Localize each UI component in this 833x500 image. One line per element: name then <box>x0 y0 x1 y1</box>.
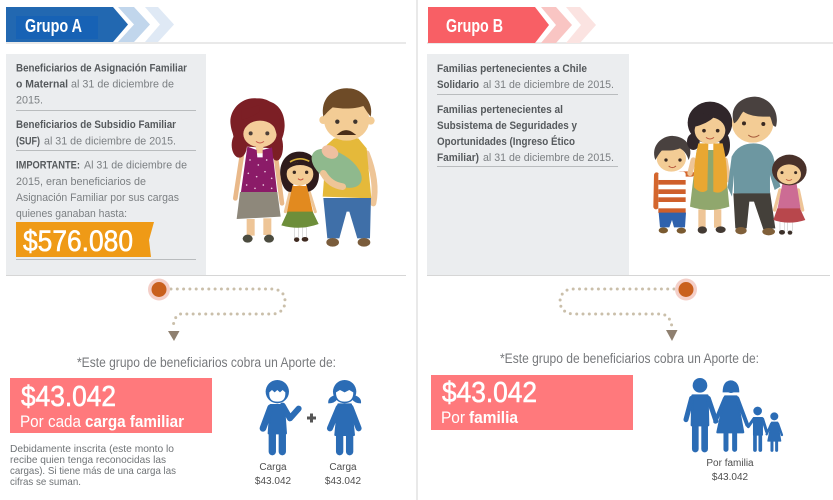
callout: income limit: $576.080 <box>23 225 133 258</box>
panel: eligibility text A: al 31 de diciembre de 2015. <box>44 136 176 148</box>
icon: boy plus girl: Carga <box>259 462 287 473</box>
illustration: family A <box>230 88 375 247</box>
panel: eligibility text A: IMPORTANTE: <box>16 160 80 172</box>
panel: eligibility text B <box>427 54 629 275</box>
callout: amount B: Por <box>441 408 465 427</box>
icon: boy plus girl: $43.042 <box>325 476 362 487</box>
panel: eligibility text A: Beneficiarios de Asignación Familiar <box>16 62 188 74</box>
icon: boy plus girl: Carga <box>329 462 357 473</box>
text: note A: Debidamente inscrita (este monto lo <box>10 443 174 455</box>
panel: eligibility text B: Familias pertenecientes a Chile <box>437 63 587 75</box>
callout: amount A: carga familiar <box>85 412 184 431</box>
panel: eligibility text B: Familiar) <box>437 152 479 164</box>
panel: eligibility text A <box>6 54 206 275</box>
text: note A: cifras se suman. <box>10 476 81 488</box>
icon: family <box>686 378 782 483</box>
panel: eligibility text A: al 31 de diciembre de <box>71 78 174 90</box>
panel: eligibility text A: (SUF) <box>16 136 40 148</box>
heading: Grupo B banner: Grupo B <box>446 16 503 36</box>
connector arrow B <box>560 278 697 341</box>
text: note A: cargas). Si tiene más de una carga las <box>10 465 176 477</box>
callout: amount B: familia <box>469 408 518 427</box>
panel: eligibility text B: Oportunidades (Ingreso Ético <box>437 135 575 148</box>
panel: eligibility text A: 2015, eran beneficiarios de <box>16 176 146 188</box>
icon: boy plus girl: $43.042 <box>255 476 292 487</box>
text: aporte B: *Este grupo de beneficiarios cobra un Aporte de: <box>500 351 759 366</box>
illustration: family B <box>654 97 807 235</box>
panel: eligibility text B: Subsistema de Seguridades y <box>437 120 578 132</box>
text: note A <box>10 443 176 488</box>
panel: eligibility text B: al 31 de diciembre de 2015. <box>483 79 614 91</box>
callout: amount B: $43.042 <box>442 377 537 409</box>
panel: eligibility text A: Asignación Familiar por sus cargas <box>16 192 179 204</box>
panel: Grupo A <box>6 7 406 488</box>
icon: family: Por familia <box>706 458 754 469</box>
text: aporte A: *Este grupo de beneficiarios cobra un Aporte de: <box>77 355 336 370</box>
panel: eligibility text B: Solidario <box>437 79 479 91</box>
connector arrow A <box>148 278 285 341</box>
panel: eligibility text A: Beneficiarios de Subsidio Familiar <box>16 119 177 131</box>
panel: Grupo B <box>427 7 833 483</box>
heading: Grupo B banner <box>428 7 596 43</box>
text: note A: recibe quien tenga reconocidas las <box>10 454 166 466</box>
callout: amount A: Por cada <box>20 412 81 431</box>
heading: Grupo A banner <box>6 7 174 42</box>
panel: eligibility text B: Familias pertenecientes al <box>437 104 563 116</box>
panel: eligibility text A: o Maternal <box>16 78 68 90</box>
callout: amount B <box>431 375 633 430</box>
heading: Grupo A banner: Grupo A <box>25 16 82 36</box>
panel: eligibility text B: al 31 de diciembre de 2015. <box>483 152 614 164</box>
callout: amount A: $43.042 <box>21 381 116 413</box>
panel: eligibility text A: quienes ganaban hasta: <box>16 208 127 220</box>
panel: eligibility text A: Al 31 de diciembre de <box>84 160 187 172</box>
panel: eligibility text A: 2015. <box>16 94 43 106</box>
icon: boy plus girl <box>255 380 362 487</box>
callout: amount A <box>10 378 212 433</box>
icon: family: $43.042 <box>712 472 749 483</box>
